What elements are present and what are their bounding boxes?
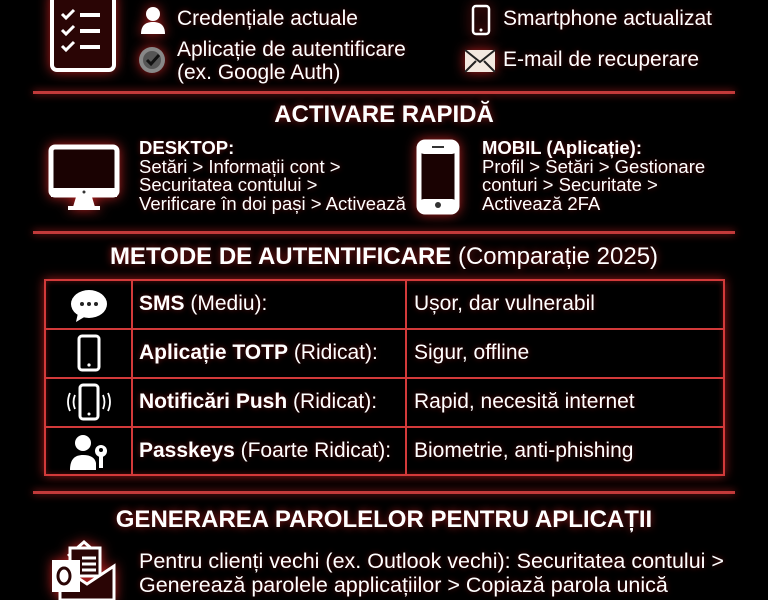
- icon: smartphone small: [463, 0, 498, 43]
- text: app passwords steps: [137, 549, 725, 598]
- text: recovery email: E-mail de recuperare: [503, 48, 699, 71]
- icon: monitor: [38, 134, 130, 220]
- text: desktop steps: [136, 137, 408, 215]
- icon: mail: [456, 40, 504, 82]
- row: push: Rapid, necesită internet: [414, 390, 635, 413]
- row: sms: SMS (Mediu):: [139, 292, 267, 315]
- row: passkeys: Passkeys (Foarte Ridicat):: [139, 439, 391, 462]
- text: smartphone: Smartphone actualizat: [503, 7, 712, 30]
- text: desktop steps: Securitatea contului >: [139, 174, 317, 195]
- text: mobile steps: conturi > Securitate >: [482, 174, 658, 195]
- icon: phone: [78, 334, 100, 372]
- row: push: Notificări Push (Ridicat):: [139, 390, 377, 413]
- text: app passwords steps: Pentru clienți vechi (ex. Outlook vechi): Securitatea contului >: [139, 549, 724, 573]
- text: desktop steps: DESKTOP:: [139, 137, 234, 158]
- heading: activare rapida: ACTIVARE RAPIDĂ: [274, 101, 494, 128]
- icon: chat bubble: [71, 290, 107, 322]
- text: credentials: Credențiale actuale: [177, 7, 358, 30]
- row: push: [67, 384, 636, 420]
- icon: authenticator: [130, 39, 174, 82]
- text: authenticator app: [176, 38, 408, 86]
- row: sms: [71, 290, 597, 322]
- text: authenticator app: (ex. Google Auth): [177, 61, 340, 84]
- heading: metode: METODE DE AUTENTIFICARE (Comparație 2025): [110, 243, 658, 270]
- row: totp: Sigur, offline: [414, 341, 529, 364]
- text: mobile steps: Profil > Setări > Gestionare: [482, 156, 705, 176]
- table: methods comparison: [44, 279, 725, 476]
- row: passkeys: Biometrie, anti-phishing: [414, 439, 633, 462]
- row: totp: Aplicație TOTP (Ridicat):: [139, 341, 378, 364]
- icon: checklist: [40, 0, 126, 82]
- text: mobile steps: Activează 2FA: [482, 192, 600, 214]
- icon: phone large: [406, 130, 470, 224]
- icon: user: [134, 0, 172, 43]
- text: desktop steps: Setări > Informații cont >: [139, 156, 341, 176]
- icon: user key: [70, 435, 107, 470]
- text: mobile steps: [480, 137, 706, 214]
- icon: vibrating phone: [67, 384, 111, 420]
- text: mobile steps: MOBIL (Aplicație):: [482, 137, 642, 158]
- row: passkeys: [70, 435, 636, 470]
- text: desktop steps: Verificare în doi pași > Activează: [139, 192, 406, 214]
- text: app passwords steps: Generează parolele applicațiilor > Copiază parola unică: [139, 573, 668, 597]
- heading: app passwords: GENERAREA PAROLELOR PENTRU APLICAȚII: [116, 506, 652, 533]
- row: totp: [78, 334, 530, 372]
- text: authenticator app: Aplicație de autentificare: [177, 38, 406, 61]
- row: sms: Ușor, dar vulnerabil: [414, 292, 595, 315]
- icon: outlook envelope: [42, 534, 126, 600]
